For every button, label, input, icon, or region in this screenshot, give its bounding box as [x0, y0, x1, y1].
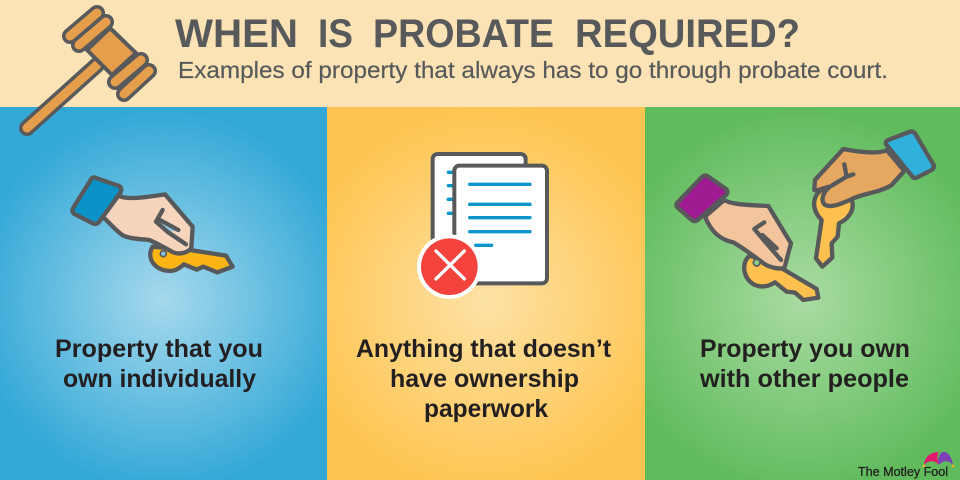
logo wordmark: The Motley Fool [858, 464, 948, 479]
icon: gavel [27, 13, 149, 128]
icon: jester hat [923, 452, 954, 467]
icon: documents with red X [417, 154, 547, 299]
icon: right hand and key [814, 132, 934, 267]
text: property you own with other people [699, 335, 910, 393]
icon: left hand and key [676, 175, 818, 300]
header band [0, 0, 960, 107]
text: property that you own individually: own individually [63, 365, 256, 393]
text: property that you own individually: Property that you [55, 335, 263, 363]
panel: no ownership paperwork [327, 107, 645, 480]
text: property you own with other people: Property you own [700, 335, 910, 363]
text: property that you own individually [55, 335, 263, 393]
text: property you own with other people: with other people [699, 365, 909, 393]
title: WHEN [175, 12, 298, 56]
text: anything without paperwork: paperwork [424, 395, 548, 423]
text: anything without paperwork: Anything that doesn’t [356, 335, 612, 363]
panel: property owned with others [645, 107, 960, 480]
title [175, 12, 800, 56]
icon: hand holding key [72, 177, 233, 272]
title: PROBATE [373, 12, 554, 56]
panel: property owned individually [0, 107, 327, 480]
text: anything without paperwork: have ownership [390, 365, 579, 393]
text: anything without paperwork [356, 335, 612, 423]
title: IS [318, 12, 353, 56]
logo: The Motley Fool [858, 452, 954, 479]
icon: two hands holding keys [676, 132, 934, 300]
title: REQUIRED? [575, 12, 800, 56]
subtitle: Examples of property that always has to go through probate court. [178, 57, 888, 83]
